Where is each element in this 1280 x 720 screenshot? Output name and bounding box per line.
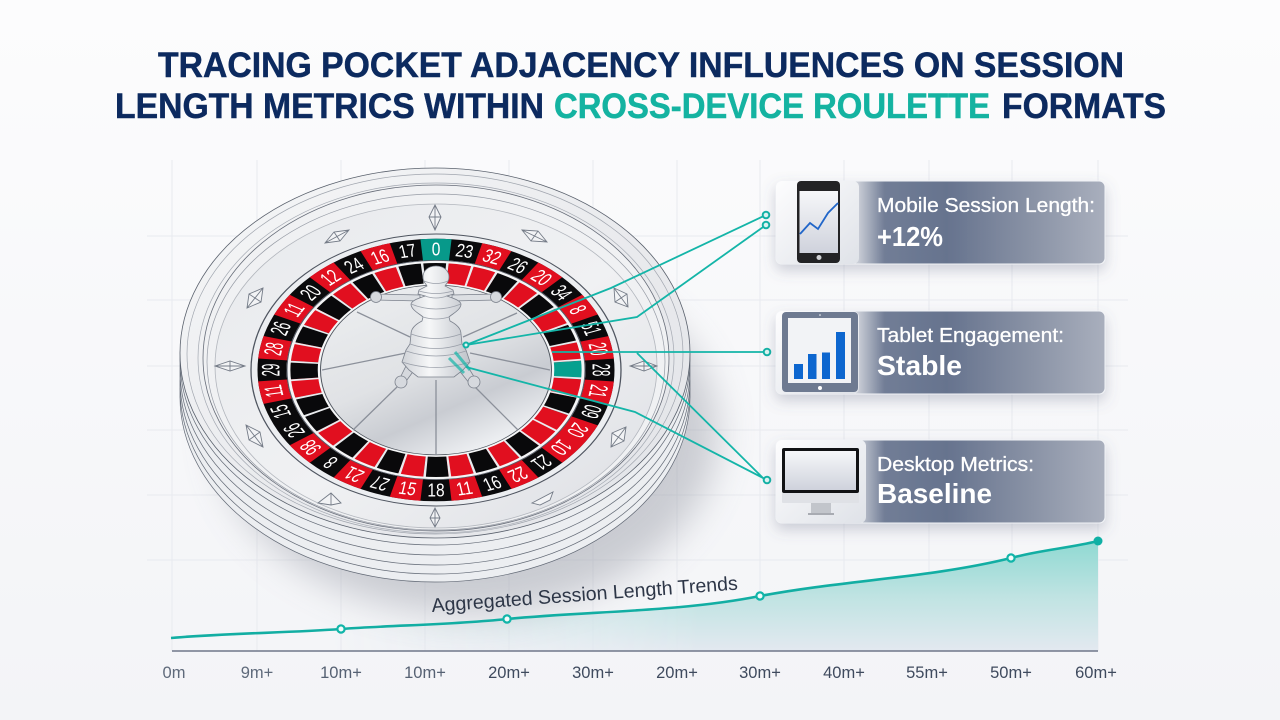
chart caption: Aggregated Session Length Trends [431, 573, 739, 617]
wheel numbers: 18 [427, 480, 445, 501]
x axis labels: 30m+ [572, 664, 614, 682]
icon panel: desktop [776, 440, 866, 523]
connector: wheel to desktop card [449, 352, 767, 482]
icon: tablet [782, 312, 858, 392]
wheel numbers: 20 [562, 420, 594, 441]
x axis labels [163, 664, 1117, 682]
wheel numbers: 20 [294, 281, 327, 304]
wheel numbers: 98 [294, 436, 327, 459]
card: desktop metrics [776, 440, 1105, 523]
decorative diamonds [215, 205, 657, 527]
x axis labels: 10m+ [404, 664, 446, 682]
wheel numbers: 21 [526, 450, 557, 474]
mobile label: Mobile Session Length: [877, 195, 1095, 217]
title [115, 46, 1166, 126]
x axis labels: 30m+ [739, 664, 781, 682]
wheel numbers: 26 [503, 253, 533, 278]
tablet label: Tablet Engagement: [877, 325, 1064, 347]
title: LENGTH METRICS WITHIN [115, 87, 544, 126]
title: CROSS-DEVICE ROULETTE [554, 87, 990, 126]
card: mobile session length [776, 181, 1105, 264]
wheel numbers: 32 [479, 245, 505, 269]
wheel numbers: 27 [367, 471, 393, 495]
wheel numbers: 11 [278, 299, 310, 320]
x axis labels: 10m+ [320, 664, 362, 682]
wheel numbers: 12 [315, 266, 346, 290]
wheel numbers: 22 [503, 462, 533, 487]
connector: wheel to mobile card lower [466, 225, 766, 345]
connector end dots [464, 212, 770, 483]
x axis labels: 60m+ [1075, 664, 1117, 682]
wheel numbers: 8 [564, 302, 592, 318]
mobile value: +12% [877, 221, 943, 252]
card: tablet engagement [776, 311, 1105, 394]
roulette wheel [180, 168, 718, 614]
wheel numbers: 20 [582, 341, 613, 357]
wheel numbers: 11 [259, 383, 290, 399]
wheel numbers: 09 [574, 402, 606, 421]
wheel numbers [258, 239, 614, 501]
area chart: aggregated session length [171, 541, 1098, 651]
x axis labels: 50m+ [990, 664, 1032, 682]
icon panel: tablet [776, 311, 859, 394]
x axis labels: 20m+ [488, 664, 530, 682]
desktop label: Desktop Metrics: [877, 454, 1034, 476]
x axis labels: 20m+ [656, 664, 698, 682]
wheel numbers: 11 [454, 478, 475, 500]
wheel numbers: 15 [266, 402, 298, 421]
wheel numbers: 16 [367, 245, 393, 269]
wheel numbers: 23 [454, 240, 475, 262]
desktop value: Baseline [877, 478, 992, 509]
x axis labels: 55m+ [906, 664, 948, 682]
trend line with markers [171, 536, 1102, 638]
x axis labels: 40m+ [823, 664, 865, 682]
wheel numbers: 26 [278, 420, 310, 441]
wheel numbers: 0 [432, 239, 440, 260]
number and pocket rings [235, 222, 637, 518]
icon: phone [797, 181, 840, 263]
disc spokes [322, 312, 550, 455]
wheel numbers: 34 [545, 281, 578, 304]
wheel numbers: 21 [582, 383, 613, 399]
x axis labels: 0m [163, 664, 185, 682]
grid lines [147, 160, 1128, 651]
connector: wheel to mobile card upper [466, 215, 766, 345]
title: TRACING POCKET ADJACENCY INFLUENCES ON SESSION [158, 46, 1124, 85]
wheel numbers: 10 [545, 436, 578, 459]
icon: monitor [782, 448, 859, 515]
wheel numbers: 20 [526, 266, 557, 290]
wheel numbers: 17 [397, 240, 418, 262]
central turret [370, 266, 502, 388]
x axis labels: 9m+ [241, 664, 273, 682]
wheel numbers: 28 [586, 364, 614, 376]
icon panel: mobile [776, 181, 859, 264]
connector: wheel to tablet card [552, 351, 767, 353]
wheel numbers: 29 [258, 364, 286, 376]
wheel numbers: 16 [479, 471, 505, 495]
title: FORMATS [1002, 87, 1166, 126]
wheel numbers: 28 [259, 341, 290, 357]
wheel numbers: 21 [339, 462, 369, 487]
wheel numbers: 51 [574, 319, 606, 338]
wheel numbers: 26 [266, 319, 298, 338]
wheel numbers: 15 [397, 478, 418, 500]
tablet value: Stable [877, 350, 962, 381]
wheel numbers: 24 [339, 253, 369, 278]
wheel numbers: 8 [318, 453, 343, 472]
